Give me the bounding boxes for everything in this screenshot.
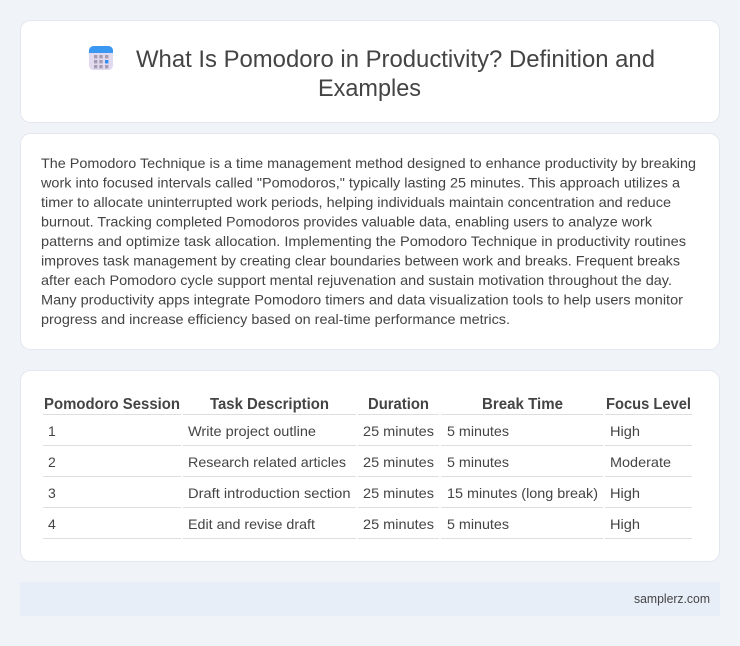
footer: samplerz.com (634, 592, 710, 606)
text block: Pomodoro Technique explanation (40, 155, 696, 327)
table row 3: 15 minutes (long break) (447, 485, 598, 501)
table row 1: 5 minutes (447, 423, 509, 439)
table row 4: 4 (48, 516, 56, 532)
table row 2: 2 (48, 454, 56, 470)
table header row (44, 396, 691, 413)
text block: Pomodoro Technique explanation: Many productivity apps integrate Pomodoro timers and data visualization tools to help users monitor (41, 292, 683, 308)
text block: Pomodoro Technique explanation: The Pomodoro Technique is a time management method designed to enhance productivity by breaking (41, 155, 696, 171)
text block: Pomodoro Technique explanation: burnout. Tracking completed Pomodoros provides valuable data, enabling users to analyze work (41, 214, 653, 230)
table row 4: 5 minutes (447, 516, 509, 532)
panel: session table (20, 370, 720, 562)
text block: Pomodoro Technique explanation: progress and increase efficiency based on real-time performance metrics. (41, 311, 510, 327)
table row 1: Write project outline (188, 423, 316, 439)
table row 1: 25 minutes (363, 423, 434, 439)
table row 4: 25 minutes (363, 516, 434, 532)
table row 4 (48, 516, 640, 532)
table row 3 (48, 485, 640, 501)
table row 2: Research related articles (188, 454, 346, 470)
text block: Pomodoro Technique explanation: timer to allocate uninterrupted work periods, helping individuals maintain concentration and reduce (41, 194, 671, 210)
table row 2: 5 minutes (447, 454, 509, 470)
table header row: Task Description (210, 396, 329, 413)
text block: Pomodoro Technique explanation: improves task management by creating clear boundaries between work and breaks. Frequent breaks (41, 252, 680, 268)
text block: Pomodoro Technique explanation: patterns and optimize task allocation. Implementing the Pomodoro Technique in productivity routines (41, 233, 686, 249)
table row 3: Draft introduction section (188, 485, 350, 501)
table row 2 (48, 454, 671, 470)
table header row: Pomodoro Session (44, 396, 180, 413)
table row 4: High (610, 516, 640, 532)
table header row: Duration (368, 396, 429, 413)
table row 1: High (610, 423, 640, 439)
table header row: Break Time (482, 396, 563, 413)
table header row: Focus Level (606, 396, 691, 413)
text block: Pomodoro Technique explanation: work into focused intervals called "Pomodoros," typically lasting 25 minutes. This approach utilizes a (40, 174, 680, 190)
table row 3: 3 (48, 485, 56, 501)
title (136, 46, 655, 102)
icon: calendar (89, 46, 113, 70)
table row 3: 25 minutes (363, 485, 434, 501)
panel: title header (20, 20, 720, 122)
table row 1: 1 (48, 423, 56, 439)
table row 4: Edit and revise draft (188, 516, 315, 532)
title: Examples (318, 75, 421, 102)
footer (20, 582, 720, 616)
table row 3: High (610, 485, 640, 501)
table row 1 (48, 423, 640, 439)
title: What Is Pomodoro in Productivity? Definition and (136, 46, 655, 73)
panel: description (20, 134, 720, 350)
text block: Pomodoro Technique explanation: after each Pomodoro cycle support mental rejuvenation and sustain motivation throughout the day. (41, 272, 672, 288)
table row 2: Moderate (610, 454, 671, 470)
table row 2: 25 minutes (363, 454, 434, 470)
